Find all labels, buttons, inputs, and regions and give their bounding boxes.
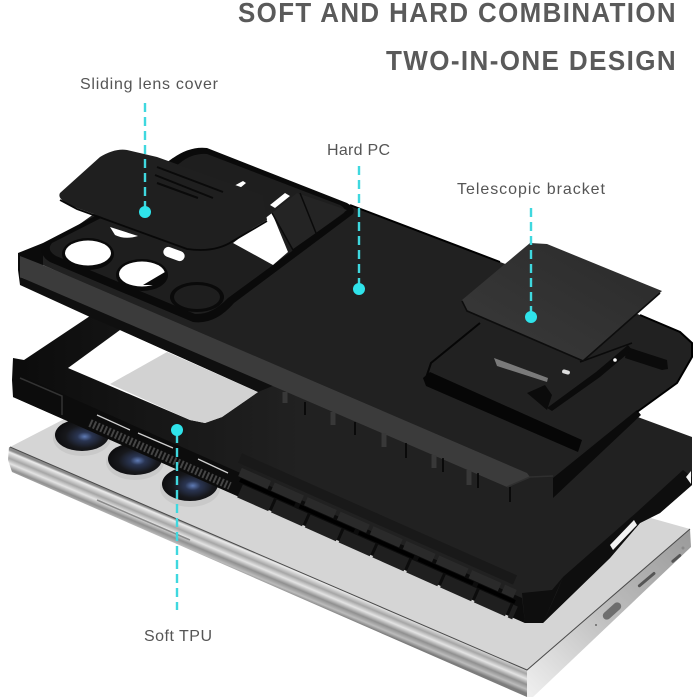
sliding lens cover (59, 150, 267, 250)
end wall corner cut-out (686, 471, 691, 484)
frame outer (42, 148, 354, 322)
camera lens 1 (53, 419, 111, 456)
leader line (144, 103, 146, 208)
PC chamfer (507, 476, 553, 487)
frame inner (50, 154, 345, 314)
TPU end wall (543, 470, 692, 623)
cover body (59, 150, 267, 249)
telescopic bracket (423, 243, 662, 452)
left side wall seam (20, 378, 62, 415)
PC left end wall (18, 243, 43, 285)
TPU case back and side (12, 316, 692, 623)
phone through window (110, 352, 258, 423)
right side line (580, 343, 632, 362)
leader line (358, 166, 360, 285)
right side slot (625, 347, 668, 370)
well thick lip (423, 372, 582, 452)
camera window (68, 330, 258, 423)
silver phone (8, 380, 691, 697)
button grille (90, 423, 230, 486)
title line 2: TWO-IN-ONE DESIGN (386, 45, 677, 76)
bracket side opening (613, 358, 617, 362)
callout: sliding lens cover (80, 76, 219, 218)
dot (525, 311, 537, 323)
PC underside left (20, 277, 275, 392)
hinge panel (272, 193, 347, 250)
soft TPU inner case (12, 316, 692, 623)
label: soft TPU: Soft TPU (144, 628, 212, 645)
callout: hard PC (327, 142, 390, 295)
dot (139, 206, 151, 218)
dot (353, 283, 365, 295)
label: telescopic bracket: Telescopic bracket (457, 181, 606, 198)
dot (171, 424, 183, 436)
TPU corner wall (522, 577, 563, 623)
hinge arm (494, 358, 548, 382)
folding arm (547, 345, 632, 411)
leader line (176, 434, 178, 610)
PC main face (43, 158, 692, 478)
hard PC outer case (18, 158, 692, 502)
phone edge highlight (10, 447, 690, 670)
lens opening 1 (62, 238, 114, 270)
cover ridges (155, 167, 223, 198)
well outline (426, 323, 480, 378)
camera frame (42, 148, 354, 322)
PC right wall (553, 410, 641, 498)
phone side buttons (97, 500, 190, 540)
bracket plate (462, 243, 662, 360)
band notches wide (285, 392, 469, 485)
side wall black seam (240, 480, 515, 602)
label: sliding lens cover: Sliding lens cover (80, 76, 219, 93)
plate lip (462, 293, 660, 361)
end wall charging cut-out (610, 520, 637, 550)
upper edge line (350, 205, 692, 412)
side wall dark strip (240, 458, 515, 580)
PC grey edge band (20, 256, 530, 487)
hinge hole (562, 369, 570, 375)
lens opening 2 (116, 259, 168, 291)
phone back surface (10, 380, 690, 670)
callout: soft TPU (144, 424, 212, 645)
phone ports (595, 546, 684, 626)
camera lens 2 (106, 443, 164, 480)
band notches thin (305, 402, 510, 502)
callout: telescopic bracket (457, 181, 606, 323)
leader line (530, 208, 532, 313)
cover lip (60, 200, 267, 250)
button highlights (97, 415, 228, 473)
side wall upper segments (240, 472, 515, 594)
phone long side rail (8, 447, 527, 697)
flash ring (170, 282, 224, 312)
TPU side wall (13, 372, 525, 623)
label: hard PC: Hard PC (327, 142, 390, 159)
arm catch (527, 385, 552, 410)
phone end face (527, 529, 691, 697)
side wall lower segments (240, 491, 515, 613)
hinge fold line (272, 193, 347, 250)
white slots (110, 181, 290, 265)
camera lens 3 (160, 467, 220, 507)
